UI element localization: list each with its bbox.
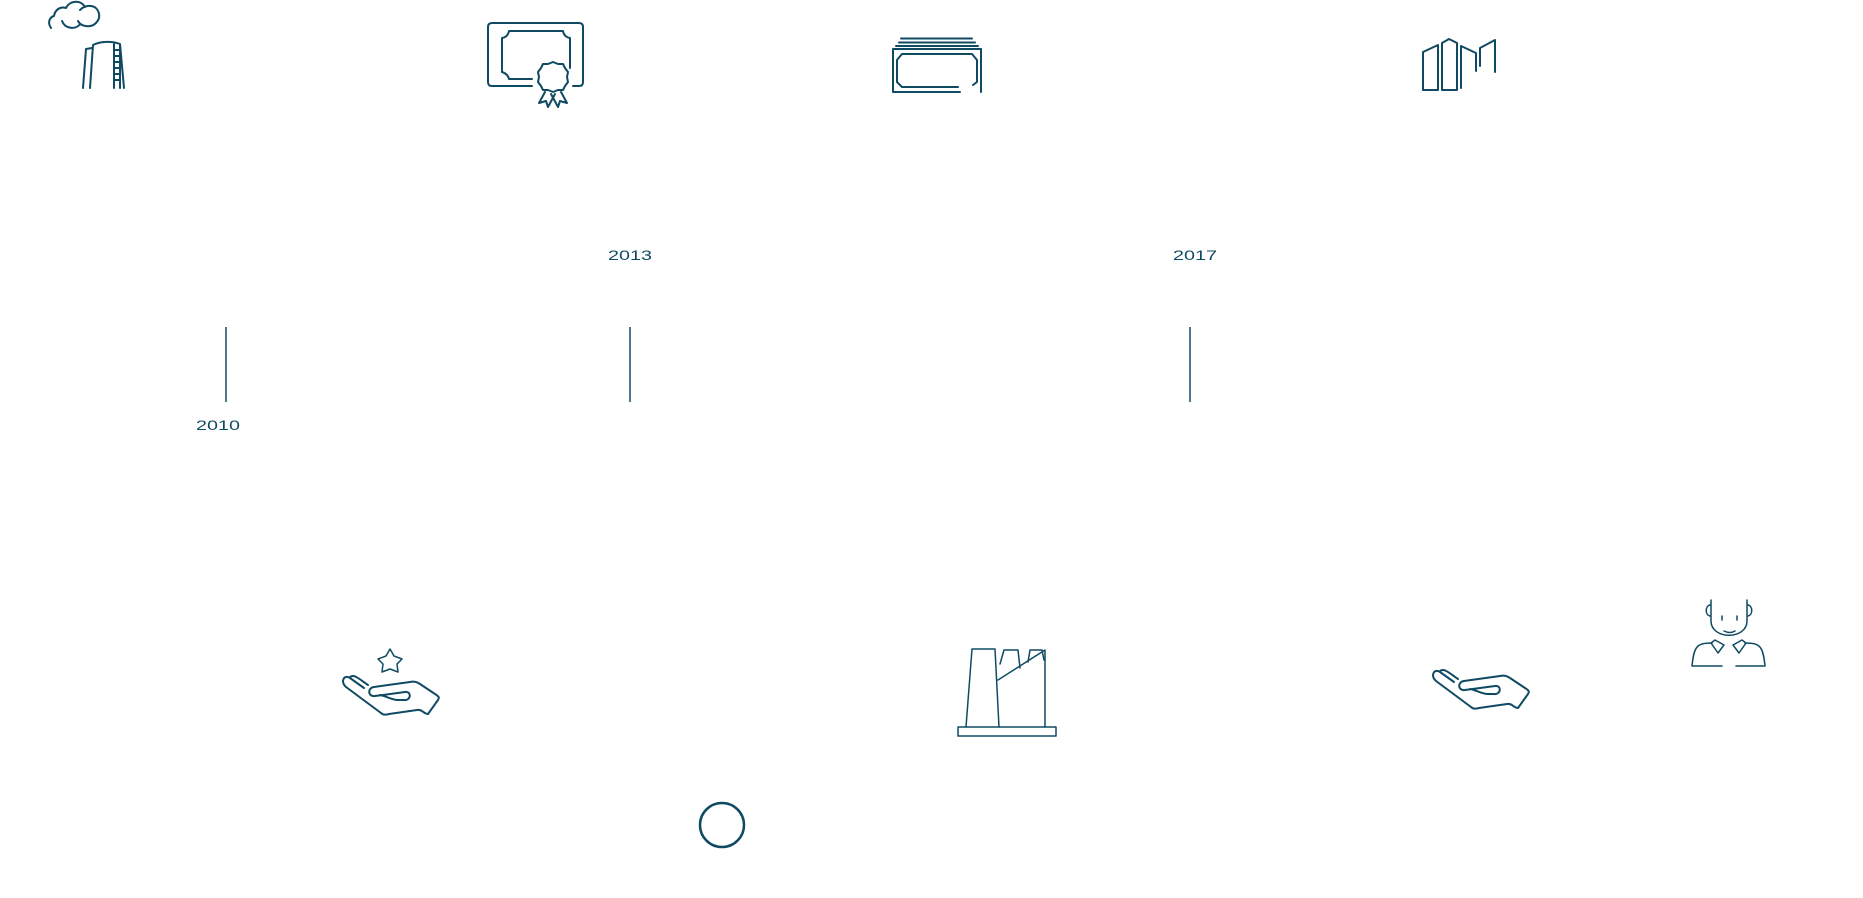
icon: certificate <box>488 23 583 107</box>
icon: cloud <box>49 2 99 28</box>
icon: tower <box>83 42 124 88</box>
icon: star <box>378 649 402 672</box>
icon: open hand <box>1433 670 1529 709</box>
timeline: 2013 marker: 2013 <box>608 247 652 263</box>
icon: circle <box>700 803 744 847</box>
icon: open hand <box>343 676 439 715</box>
icon: buildings <box>1423 39 1495 90</box>
timeline: 2010 marker: 2010 <box>196 417 240 433</box>
icon: factory <box>958 649 1056 736</box>
timeline: 2010 marker <box>196 327 240 433</box>
icon: person <box>1692 600 1765 666</box>
icon: stacked banknotes <box>893 38 981 92</box>
timeline: 2017 marker: 2017 <box>1173 247 1217 263</box>
